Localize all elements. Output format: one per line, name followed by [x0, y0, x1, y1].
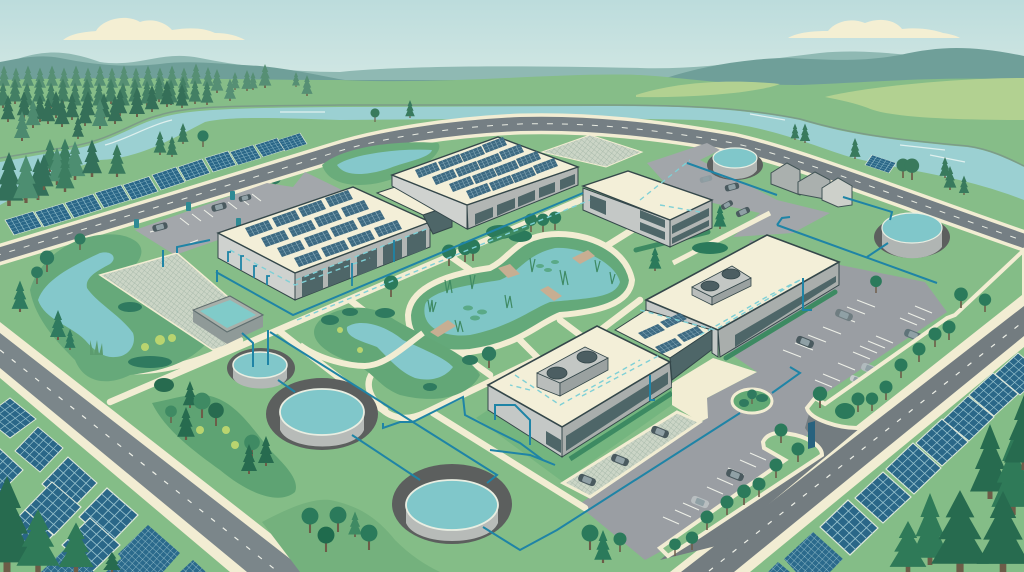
sky — [0, 0, 1024, 90]
road: curved north road — [0, 124, 1024, 256]
solar array: south west field — [0, 398, 206, 572]
scattered pines near the river — [108, 100, 969, 195]
central pond reeds — [428, 258, 615, 332]
small wetland water — [347, 323, 453, 380]
stormwater pipes — [163, 163, 937, 550]
small solar panel, north east — [865, 155, 896, 173]
retention tank 4 — [707, 148, 763, 180]
cream plaza — [672, 358, 757, 422]
street trees along parking — [669, 275, 991, 556]
conifer forest, back row — [0, 64, 313, 101]
central pond boardwalks — [430, 250, 595, 337]
wetland shrubs — [321, 308, 496, 391]
west pond water — [38, 252, 134, 357]
parking lot: west — [135, 172, 342, 255]
infiltration basin — [193, 296, 263, 344]
pump houses — [771, 163, 852, 207]
parking stripes: west lot — [150, 194, 261, 243]
parking lot: north east — [647, 143, 830, 237]
parking stripes: east lot — [663, 300, 932, 524]
retention tank 5 — [874, 213, 950, 258]
permeable parking bay — [563, 412, 700, 497]
far mountains — [0, 52, 1024, 100]
building B: solar warehouse — [392, 137, 578, 229]
central pond: cream ring path — [408, 234, 632, 353]
retention tank 2 — [266, 378, 378, 450]
island bushes — [739, 389, 768, 407]
wetland garden: west pond surround — [30, 234, 205, 381]
HVAC unit: building D — [692, 266, 751, 305]
large pine cluster, left — [0, 138, 102, 206]
hedge along building E — [570, 393, 672, 459]
cloud: right — [788, 20, 960, 38]
hill trees — [302, 507, 626, 563]
permeable paving: west — [100, 253, 228, 350]
planted strip: lower parking island — [660, 433, 822, 556]
building B roof solar panels — [415, 137, 558, 199]
top wetland garden — [322, 142, 439, 185]
cloud: left — [63, 18, 245, 40]
cream path: north east lawn edge — [673, 213, 770, 263]
downspouts on building A — [228, 240, 394, 286]
lawn hill: south — [262, 500, 440, 572]
forest patch: south west lawn — [152, 395, 296, 498]
west garden shrubs and trees — [12, 233, 176, 368]
cream path: site walkway network — [110, 196, 640, 508]
cream path crossing wetland — [300, 333, 423, 366]
small wetland: surround — [314, 308, 480, 399]
river — [0, 106, 1024, 205]
forest patch trees — [154, 378, 274, 474]
HVAC unit: building E — [537, 347, 608, 396]
solar array: south east field — [768, 353, 1024, 572]
downspouts on building E — [495, 278, 812, 445]
building C: office — [583, 171, 712, 247]
EV chargers: west lot — [134, 191, 241, 228]
solar array: north row — [5, 133, 307, 235]
hedges along buildings — [490, 227, 835, 458]
river highlights — [105, 112, 965, 162]
retention tank 3 — [392, 464, 512, 544]
far meadow — [0, 75, 1024, 300]
road entry apron — [660, 400, 860, 560]
building E: office with HVAC — [488, 326, 672, 457]
cars — [152, 175, 923, 509]
central pond lily pads — [463, 260, 559, 320]
planted strip: upper east parking island — [807, 250, 1024, 428]
road: south east road — [670, 293, 1024, 572]
building D connector solar panels — [638, 313, 704, 354]
parking lot: east and south — [578, 240, 947, 560]
river bank — [0, 105, 1024, 166]
connector between warehouses — [377, 183, 452, 234]
kiosk sign — [808, 421, 815, 449]
conifer forest, front rows — [1, 80, 188, 141]
retention tank 1 — [227, 348, 295, 388]
light dashed water lines — [230, 160, 800, 405]
trees beside ponds — [384, 205, 728, 301]
building A roof solar panels — [245, 190, 402, 267]
building D: office with HVAC — [615, 235, 839, 380]
pines: south west corner — [0, 476, 121, 572]
permeable paving: north — [542, 135, 642, 167]
near mountains — [0, 48, 1024, 110]
green lawn beside building E — [476, 387, 683, 482]
round planted island — [732, 389, 772, 413]
light green field patches — [636, 78, 1024, 120]
pines: south east corner — [890, 395, 1024, 572]
cars in permeable bay — [577, 425, 670, 487]
building A: solar warehouse — [218, 187, 430, 300]
central pond water — [424, 248, 620, 336]
conifer forest, mid row — [0, 76, 213, 108]
road: south west road — [0, 322, 320, 572]
